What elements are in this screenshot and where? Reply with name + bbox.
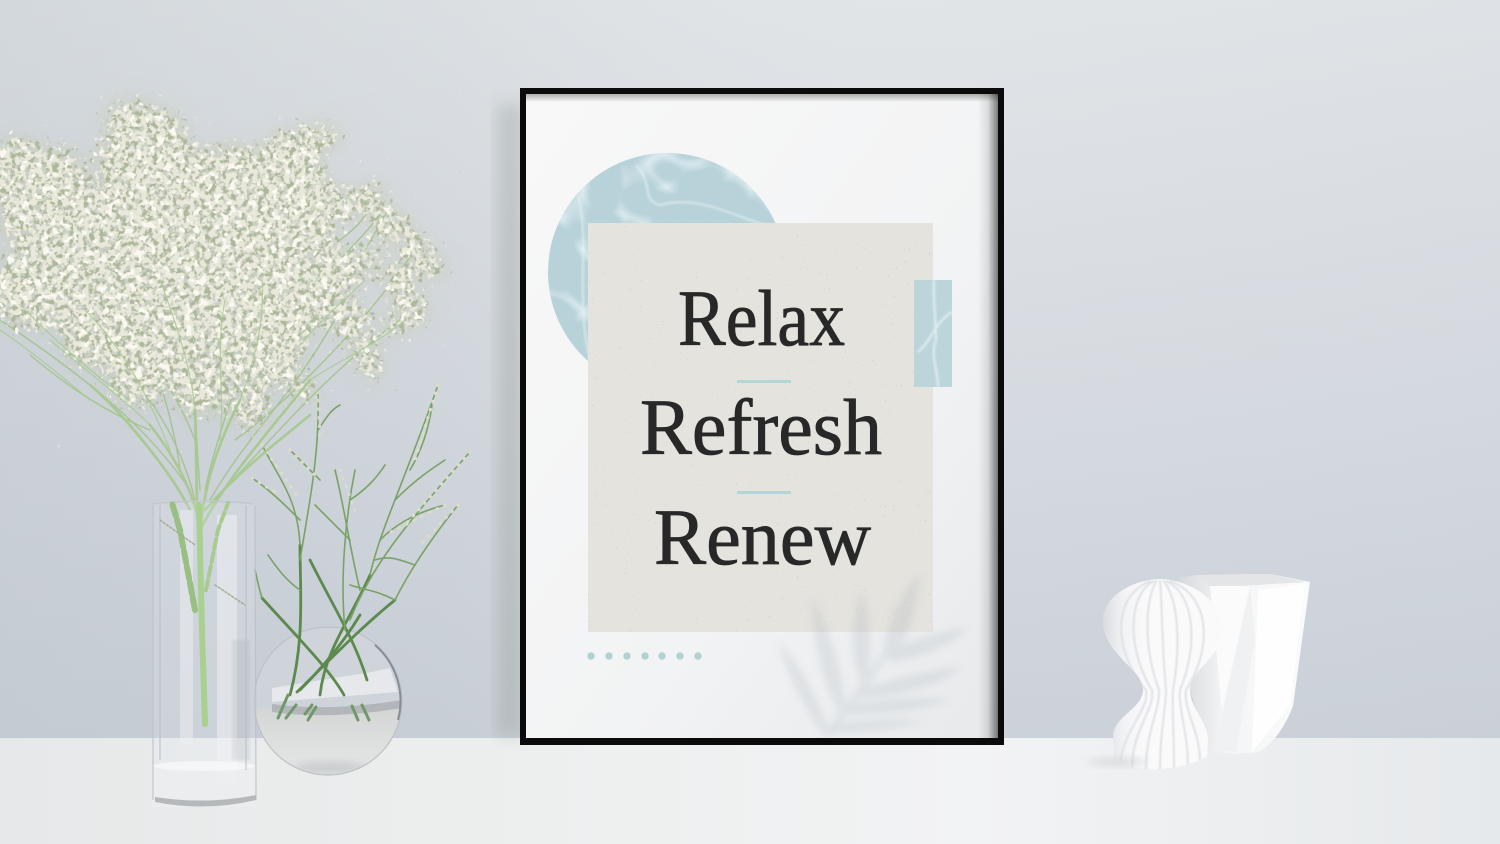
word: Relax: Relax [678, 276, 845, 363]
water texture circle [548, 153, 776, 361]
vase contact shadow [1088, 758, 1148, 766]
dotted row [587, 652, 702, 660]
table surface [0, 738, 1500, 844]
baby's breath flower cloud [0, 95, 450, 530]
water fill [256, 716, 398, 748]
inner frame shadows [526, 94, 998, 738]
ribbed white vase [1103, 579, 1216, 769]
frame shadow on wall [498, 104, 522, 736]
stem ends in water [278, 695, 369, 720]
refracted stem inside vase [160, 503, 245, 724]
palm leaf shadow [782, 580, 959, 736]
right ceramic vases [1088, 574, 1310, 775]
word: Refresh: Refresh [640, 385, 882, 472]
faceted white vase [1178, 574, 1310, 754]
poster mat [526, 94, 998, 738]
flower mass underlay [0, 95, 450, 432]
main green stems [0, 280, 405, 530]
fine branching stems behind flowers [0, 190, 415, 500]
small green sprigs [252, 385, 470, 695]
poster frame [520, 88, 1004, 745]
divider 1 [737, 380, 791, 383]
glass sphere vase [250, 627, 406, 783]
divider 2 [737, 491, 791, 494]
tall glass cylinder vase [152, 501, 256, 807]
beige text panel [588, 223, 933, 632]
water texture rectangle [914, 280, 952, 387]
flower blossoms [0, 95, 450, 432]
word: Renew: Renew [654, 495, 871, 582]
